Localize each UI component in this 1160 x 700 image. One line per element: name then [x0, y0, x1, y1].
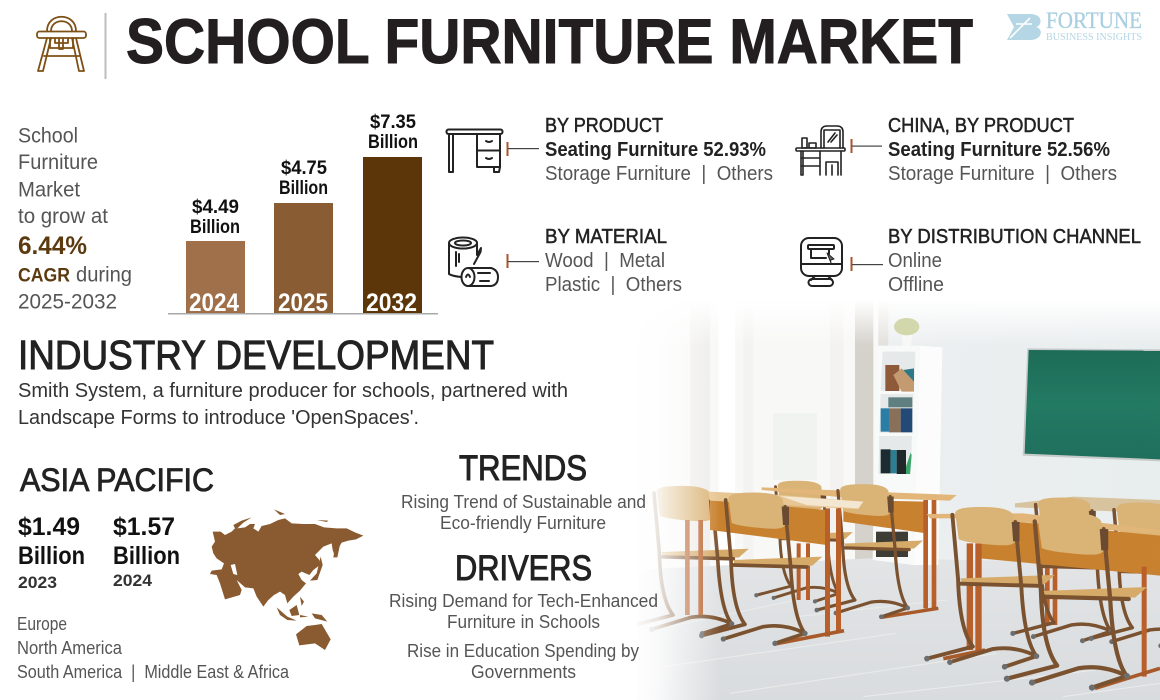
bar chart: $4.49	[192, 197, 239, 218]
bar chart: 2025	[278, 289, 328, 317]
connector: by material	[506, 254, 539, 268]
segment: china by product	[888, 115, 1117, 185]
segment: by material: Plastic | Others	[545, 274, 682, 296]
connector: distribution	[850, 257, 883, 271]
segment: china by product: CHINA, BY PRODUCT	[888, 115, 1074, 137]
desk back right	[1015, 497, 1160, 625]
asia pacific values: 2023	[18, 573, 57, 592]
growth summary text: School	[18, 124, 78, 148]
map: asia pacific	[210, 509, 363, 650]
classroom photo	[600, 300, 1160, 700]
trends text: Eco-friendly Furniture	[440, 513, 606, 533]
trends text	[401, 492, 646, 533]
drivers text: Governments	[471, 662, 576, 682]
industry development text: Landscape Forms to introduce 'OpenSpaces'.	[18, 407, 419, 429]
desk front left	[685, 492, 863, 644]
icon: wood logs	[449, 238, 498, 286]
segment: by material: Wood | Metal	[545, 250, 665, 272]
trends heading: TRENDS	[459, 449, 587, 488]
industry development text: Smith System, a furniture producer for schools, partnered with	[18, 380, 568, 402]
desk front right	[927, 513, 1160, 688]
floor	[630, 558, 1160, 700]
segment: by product: Storage Furniture | Others	[545, 163, 773, 185]
asia pacific values: 2024	[113, 571, 153, 590]
books	[885, 365, 899, 391]
bar chart: $7.35	[370, 112, 416, 133]
trends text: Rising Trend of Sustainable and	[401, 492, 646, 512]
segment: by distribution channel: Online	[888, 250, 942, 272]
segment: by product: BY PRODUCT	[545, 115, 663, 137]
icon: vanity dresser	[796, 126, 845, 175]
growth summary text: Market	[18, 178, 80, 202]
desk back left	[762, 487, 957, 617]
back chairs and desks	[754, 481, 853, 603]
asia pacific values: $1.49	[18, 513, 80, 541]
segment: by distribution channel: Offline	[888, 274, 944, 296]
bar chart: $4.75	[281, 158, 327, 179]
title: SCHOOL FURNITURE MARKET	[126, 7, 973, 77]
segment: by product: Seating Furniture 52.93%	[545, 139, 766, 161]
industry development text	[18, 380, 568, 429]
growth summary text: during	[76, 264, 132, 286]
segment: by product	[545, 115, 773, 185]
bookcase	[873, 346, 942, 565]
growth summary text: CAGR	[18, 266, 70, 286]
growth summary text: to grow at	[18, 205, 108, 228]
other regions: Europe	[17, 614, 67, 634]
drivers text: Rise in Education Spending by	[407, 641, 639, 661]
segment: by material	[545, 226, 682, 296]
bar chart: Billion	[279, 178, 328, 199]
drivers text	[389, 591, 658, 682]
other regions: North America	[17, 638, 123, 658]
growth summary text: 2025-2032	[18, 290, 117, 314]
icon: desk	[446, 130, 502, 172]
industry development heading: INDUSTRY DEVELOPMENT	[18, 332, 494, 378]
bar chart: 2024	[189, 289, 239, 317]
photo left fade	[600, 300, 720, 700]
growth summary text: Furniture	[18, 151, 98, 174]
bar chart: 2032	[366, 289, 417, 317]
logo: Fortune Business Insights: FORTUNE	[1046, 8, 1142, 33]
drivers heading: DRIVERS	[455, 549, 592, 588]
asia pacific values: Billion	[18, 542, 85, 570]
curtains	[660, 300, 888, 587]
growth summary text	[18, 124, 132, 314]
bar chart: Billion	[190, 217, 240, 238]
segment: china by product: Storage Furniture | Others	[888, 163, 1117, 185]
asia pacific heading: ASIA PACIFIC	[20, 462, 214, 498]
drivers text: Furniture in Schools	[447, 612, 600, 632]
connector: by product	[506, 142, 539, 156]
chalkboard	[1023, 348, 1160, 461]
icon: online monitor	[801, 238, 842, 286]
segment: china by product: Seating Furniture 52.56%	[888, 139, 1110, 161]
connector: china	[850, 139, 882, 153]
drivers text: Rising Demand for Tech-Enhanced	[389, 591, 658, 611]
bar chart: Billion	[368, 132, 418, 153]
logo: Fortune Business Insights	[1007, 8, 1142, 43]
segment: by distribution channel	[888, 226, 1141, 296]
asia pacific values: Billion	[113, 542, 180, 570]
icon: high chair	[37, 17, 86, 71]
growth summary text: 6.44%	[18, 232, 87, 260]
floor planks	[637, 600, 1160, 697]
other regions: South America | Middle East & Africa	[17, 662, 290, 682]
segment: by distribution channel: BY DISTRIBUTION CHANNEL	[888, 226, 1141, 248]
photo top fade	[636, 300, 1160, 346]
header divider	[104, 13, 106, 79]
asia pacific values	[18, 513, 180, 592]
plant	[894, 318, 919, 345]
bar chart	[168, 112, 438, 317]
asia pacific values: $1.57	[113, 513, 175, 541]
segment: by material: BY MATERIAL	[545, 226, 667, 248]
logo: Fortune Business Insights: BUSINESS INSIGHTS	[1046, 32, 1142, 43]
other regions	[17, 614, 290, 682]
